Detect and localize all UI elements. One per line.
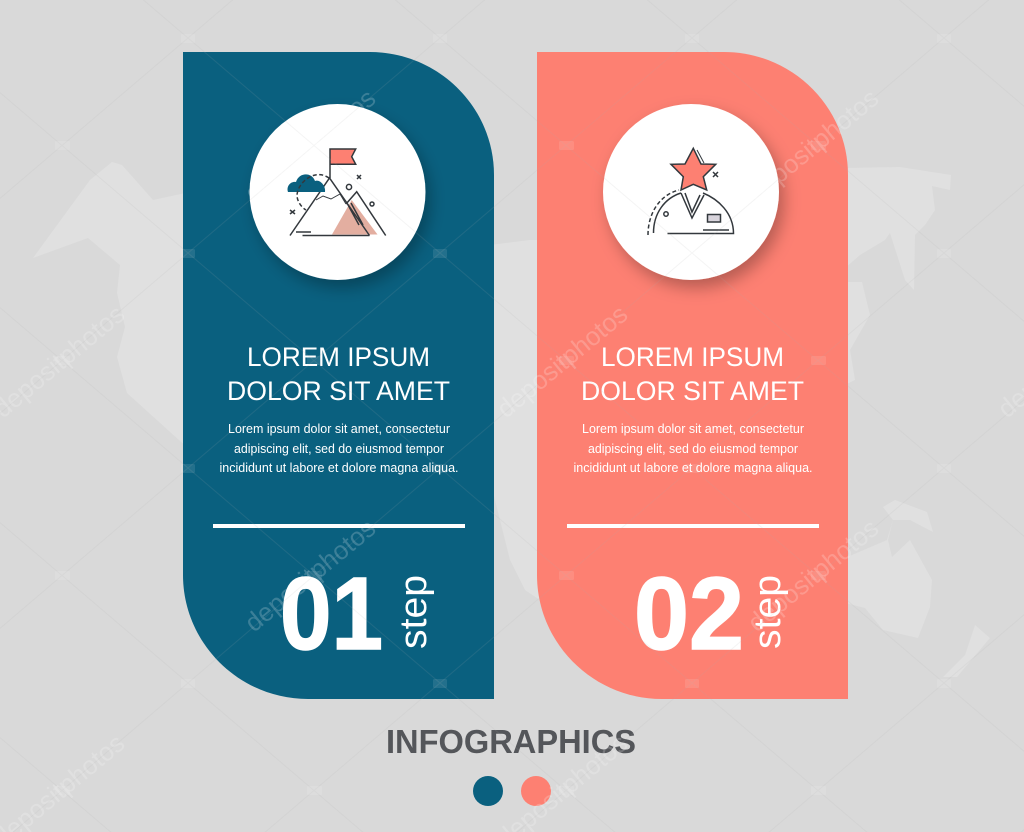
heading: LOREM IPSUM (247, 342, 430, 372)
legend dots (473, 776, 551, 806)
divider (213, 524, 465, 528)
body text: Lorem ipsum dolor sit amet, consectetur (228, 422, 450, 436)
step number: 02 (634, 556, 744, 671)
body text: adipiscing elit, sed do eiusmod tempor (234, 442, 444, 456)
heading (227, 342, 450, 406)
heading: LOREM IPSUM (601, 342, 784, 372)
heading (581, 342, 804, 406)
body text: incididunt ut labore et dolore magna aliqua. (220, 461, 458, 475)
icon circle: star (603, 104, 779, 280)
body text: incididunt ut labore et dolore magna aliqua. (574, 461, 812, 475)
watermark: depositphotos (742, 513, 884, 638)
title: INFOGRAPHICS (386, 723, 636, 760)
panel shape: coral (537, 52, 848, 699)
icon: person with star (648, 148, 734, 235)
world map silhouette (33, 162, 990, 677)
step label: step (393, 575, 435, 649)
panel: step 02 (537, 52, 848, 699)
body text (574, 422, 812, 475)
heading: DOLOR SIT AMET (227, 376, 450, 406)
panel: step 01 (183, 52, 494, 699)
body text: adipiscing elit, sed do eiusmod tempor (588, 442, 798, 456)
watermark: depositphotos (239, 513, 381, 638)
step label: step (747, 575, 789, 649)
divider (567, 524, 819, 528)
watermark: depositphotos (239, 83, 381, 208)
watermark: depositphotos (491, 299, 633, 424)
body text (220, 422, 458, 475)
step number: 01 (280, 556, 383, 671)
icon: mountain with flag (288, 149, 386, 236)
icon circle: mountain (250, 104, 426, 280)
panel shape: navy (183, 52, 494, 699)
body text: Lorem ipsum dolor sit amet, consectetur (582, 422, 804, 436)
watermark: depositphotos (742, 83, 884, 208)
heading: DOLOR SIT AMET (581, 376, 804, 406)
